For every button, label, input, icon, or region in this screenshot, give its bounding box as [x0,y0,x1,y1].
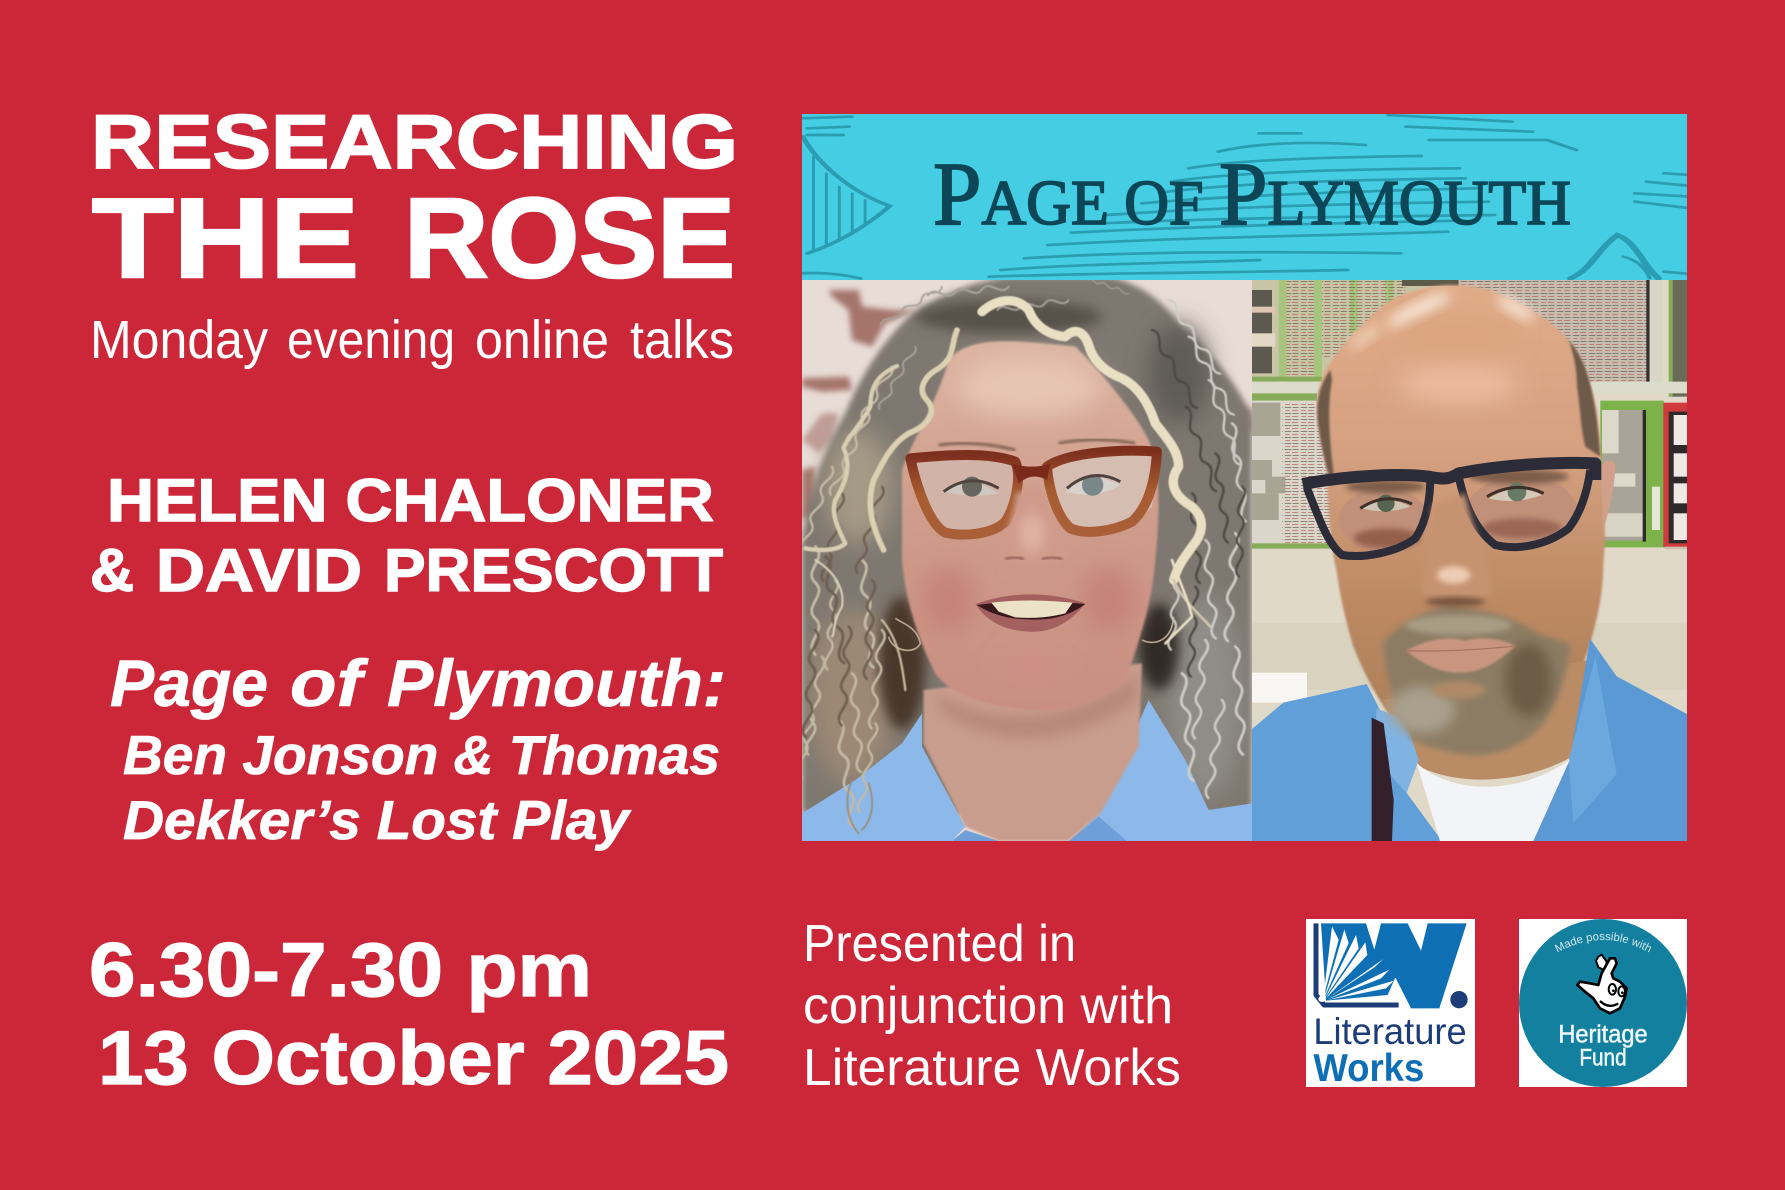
photo: David Prescott [1252,280,1687,841]
title line: The Rose [92,175,735,301]
talk title line 2: Ben Jonson & Thomas [123,724,720,786]
presented in conjunction text [803,915,1181,1097]
blonde locks [982,301,1201,580]
speaker: David Prescott [90,537,723,604]
logo W mark [1316,923,1468,1008]
neck [1383,660,1589,780]
temple hair [1569,340,1600,457]
presented line 2: conjunction with [803,977,1173,1035]
speaker: David Prescott: & [90,537,134,604]
date: 13 October 2025 [98,1016,729,1101]
shirt [1252,684,1442,841]
nose [1422,493,1492,602]
mouth [1406,638,1515,673]
logo: Literature Works [1306,919,1475,1090]
lanyard [1372,718,1394,841]
subtitle: Monday [90,310,268,370]
presented line 1: Presented in [803,915,1076,973]
subtitle [90,310,734,370]
logo text Heritage: Heritage [1558,1022,1648,1049]
hair mass [802,277,1252,813]
earrings [889,618,920,650]
ear [1600,461,1615,528]
logo text Literature: Literature [1313,1010,1467,1052]
poster [91,114,1687,1087]
presented line 3: Literature Works [803,1039,1181,1097]
curls [790,276,1249,833]
speaker: Helen Chaloner: HELEN CHALONER [107,467,714,534]
face [902,341,1159,710]
photo: Helen Chaloner [790,276,1252,841]
beard [1383,605,1570,755]
heading block [90,100,738,370]
logo text Fund: Fund [1579,1044,1627,1071]
subtitle: evening [287,310,455,370]
brick wall patches [802,290,1252,520]
date and time [89,928,729,1101]
talk title [110,646,726,851]
subtitle: talks [630,310,734,370]
mouth [975,594,1085,632]
logo text arc: Made possible with [1554,932,1651,952]
wall [1252,280,1687,841]
lucky hand icon [1577,955,1627,1013]
title line: Researching: RESEARCHING [91,100,738,185]
noticeboard [1252,280,1687,549]
lenses [916,460,1013,530]
speaker: David Prescott: DAVID [156,537,362,604]
banner title: PAGE OF PLYMOUTH [933,145,1571,244]
talk title line 1: Page [110,646,268,720]
subtitle: online [475,310,609,370]
banner: Page of Plymouth [802,114,1691,280]
eye sockets [1339,493,1424,550]
logo: Heritage Fund [1519,919,1687,1087]
speaker: David Prescott: PRESCOTT [384,537,723,604]
eyes [946,484,998,496]
glasses [910,451,1157,535]
time: 6.30-7.30 pm [89,928,592,1013]
talk title line 1 [110,646,726,720]
white t-shirt [1417,759,1570,841]
logo text Works: Works [1313,1046,1424,1090]
glasses [1303,463,1595,556]
title line: The Rose: ROSE [404,175,735,301]
nose [1003,488,1057,530]
talk title line 1: of [290,646,369,720]
head [1317,285,1605,752]
neck [924,663,1142,841]
title line: The Rose: THE [92,175,359,301]
shirt [802,713,965,841]
brows [939,443,1015,450]
talk title line 3: Dekker’s Lost Play [123,789,631,851]
speakers [90,467,723,604]
talk title line 1: Plymouth: [387,646,726,720]
